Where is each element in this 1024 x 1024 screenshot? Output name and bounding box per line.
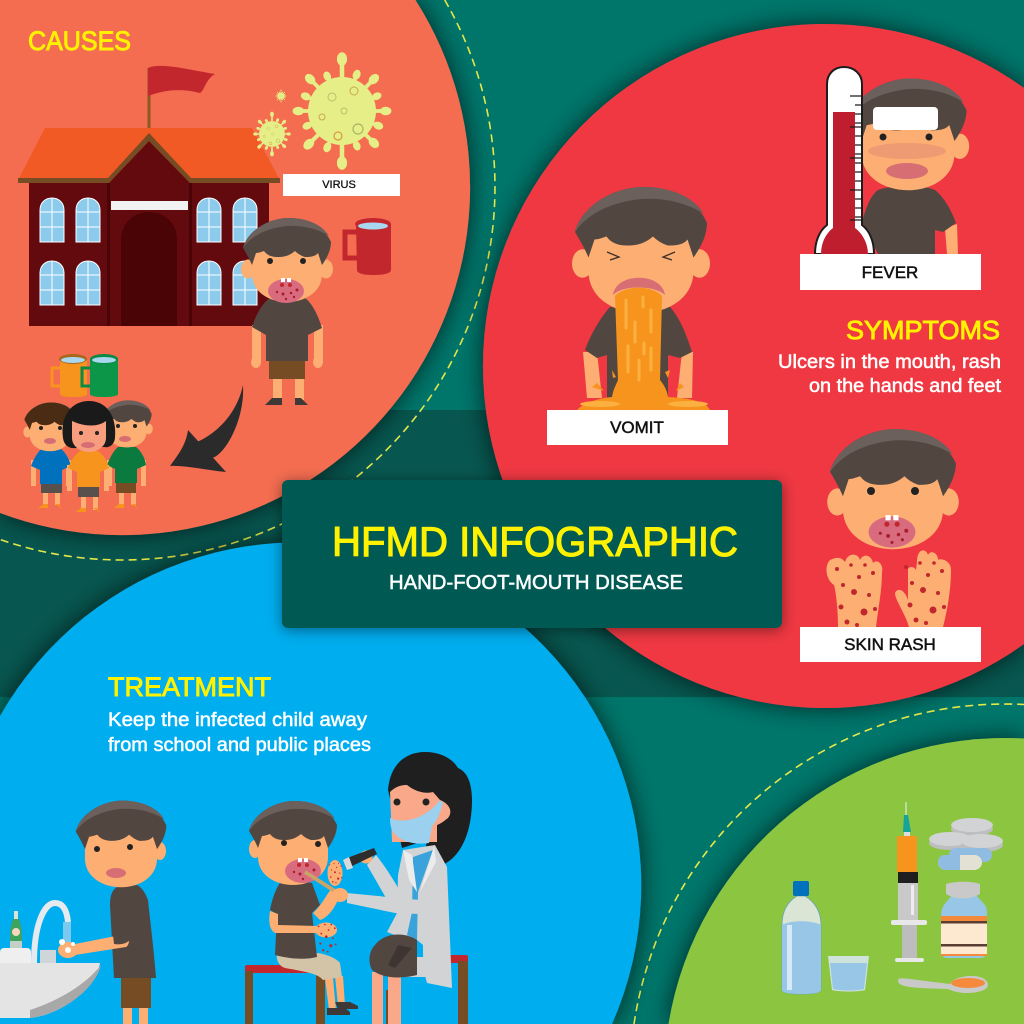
text: symptoms description: Ulcers in the mouth, rash [778, 352, 1001, 373]
panel: treatment [0, 542, 641, 1024]
dashed ring: medicine [634, 704, 1024, 1024]
icon: doctor stool [386, 955, 468, 1024]
school building [18, 66, 280, 326]
icon: sink [0, 903, 101, 1018]
panel: medicine [668, 738, 1024, 1024]
text: treatment description: from school and public places [108, 735, 371, 756]
child: blue shirt [23, 402, 77, 508]
label: virus: VIRUS [322, 179, 356, 191]
heading: causes: CAUSES [28, 26, 131, 56]
icon: spoon [898, 976, 988, 993]
label: skin rash [800, 627, 981, 662]
icon: rash foot [827, 555, 882, 627]
label: fever [800, 254, 981, 290]
text: treatment description [108, 710, 371, 756]
label: skin rash: SKIN RASH [844, 635, 936, 654]
icon: soap bottle [10, 911, 22, 948]
icon: viruses [253, 52, 391, 170]
icon: red mug [345, 218, 391, 275]
icon: medicine vial [941, 882, 987, 958]
boy on stool being examined [245, 801, 358, 1024]
panel: title card [282, 480, 782, 628]
icon: syringe [891, 802, 927, 962]
icon: stool [245, 965, 325, 1024]
subtitle: HAND-FOOT-MOUTH DISEASE [389, 572, 683, 594]
icon: rash hand [895, 550, 951, 627]
three children [23, 400, 153, 512]
label: vomit: VOMIT [610, 418, 664, 437]
skin rash boy [827, 429, 959, 549]
background band [0, 410, 1024, 697]
label: virus [283, 174, 400, 196]
icon: pills [929, 818, 1003, 870]
label: vomit [547, 410, 728, 445]
infected boy [241, 218, 333, 405]
text: symptoms description: on the hands and feet [809, 376, 1002, 397]
icon: water bottle [782, 881, 821, 994]
icon: thermometer [815, 67, 874, 254]
panel: symptoms [483, 24, 1024, 708]
text: symptoms description [778, 352, 1002, 397]
text: treatment description: Keep the infected child away [108, 710, 368, 731]
heading: treatment: TREATMENT [108, 672, 271, 702]
label: fever: FEVER [862, 263, 918, 282]
panel: causes [0, 0, 470, 535]
arrow [170, 385, 243, 472]
fever boy [847, 78, 969, 254]
doctor [332, 752, 472, 1024]
dashed ring: causes [0, 0, 495, 560]
child: orange shirt girl [63, 401, 115, 512]
child: green shirt [101, 400, 153, 508]
vomiting boy [572, 187, 710, 410]
icon: glass of water [828, 956, 869, 992]
title: HFMD INFOGRAPHIC [332, 518, 738, 565]
heading: symptoms: SYMPTOMS [846, 315, 1000, 345]
icon: shared cups [52, 354, 118, 397]
hand washing boy at sink [0, 801, 166, 1024]
